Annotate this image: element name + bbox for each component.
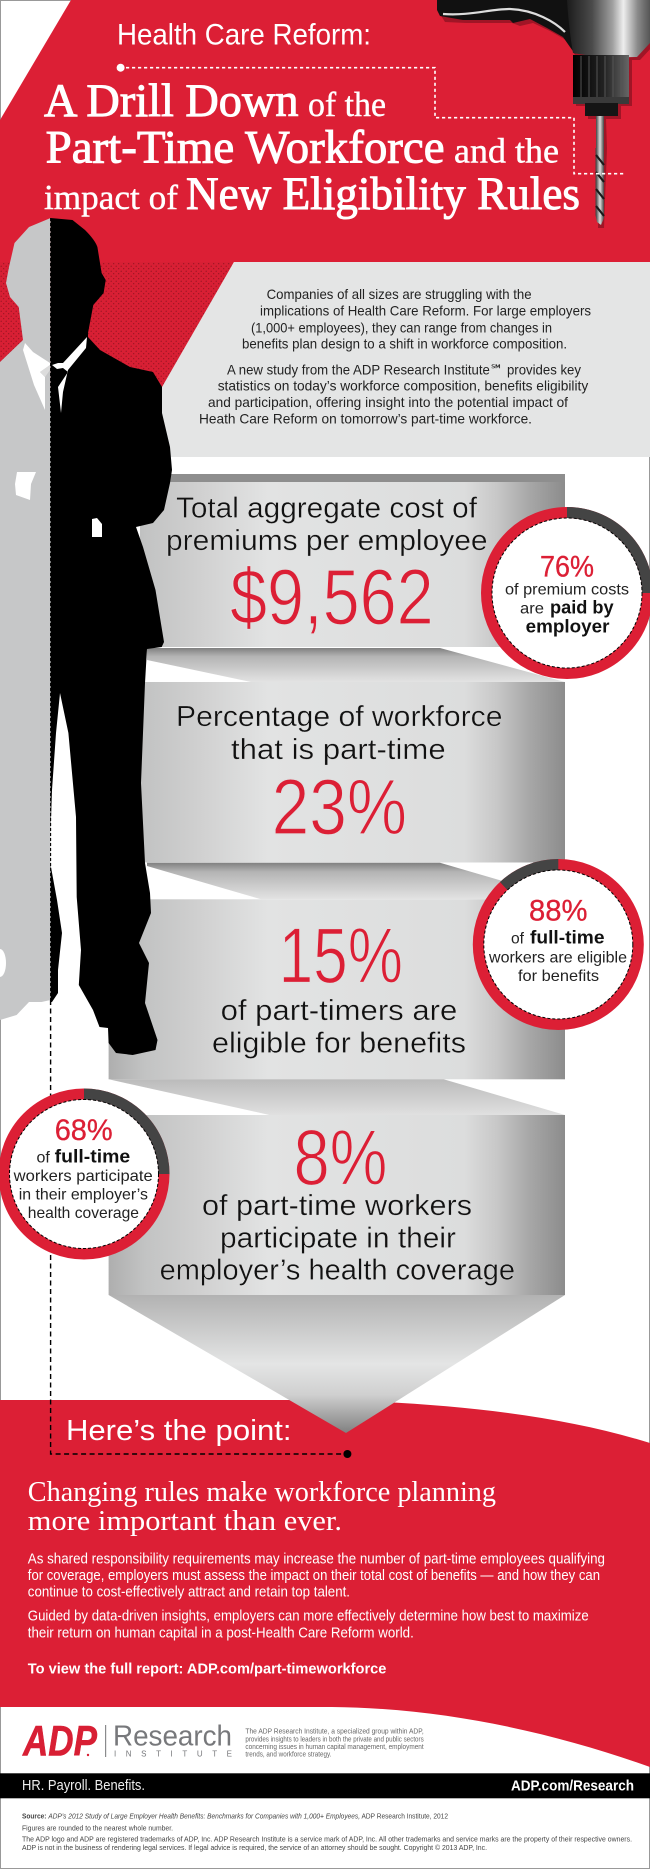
intro text: benefits plan design to a shift in workforce composition. [242,335,567,351]
subheading: changing rules [28,1476,496,1537]
stat label: part-timers eligible [212,995,466,1060]
source and legal footnotes: Source: ADP’s 2012 Study of Large Employer Health Benefits: Benchmarks for Companies with 1,000+ Employees, ADP Research Institute, 2012 [22,1812,448,1821]
logo description text: concerning issues in human capital management, employment [245,1744,424,1751]
title line: impact of: impact of [44,178,178,217]
callout: 68% of full-time participate [4,1094,164,1254]
arrow pointing down [109,1295,565,1433]
callout text: premium costs: employer [526,617,610,637]
title line: Part-Time Workforce: Part-Time Workforce [46,122,445,174]
subheading: changing rules: Changing rules make workforce planning [28,1476,496,1508]
title block [44,18,580,220]
dashed line from silhouette to conclusion [51,218,351,1458]
stat label: part-timers eligible: of part-timers are [221,995,457,1027]
stat label: percentage of workforce: Percentage of workforce [176,701,502,733]
website: ADP.com/Research [511,1778,634,1794]
logo description text: provides insights to leaders in both the private and public sectors [245,1736,424,1743]
white hand gap [0,949,6,977]
stat label: participation: participate in their [220,1222,456,1254]
shirt collar left [23,343,50,410]
intro text: and participation, offering insight into the potential impact of [208,394,568,410]
call to action: full report: To view the full report: ADP.com/part-timeworkforce [28,1661,386,1677]
callout text: full-time eligible: of [511,930,525,947]
callout text: full-time eligible: for benefits [518,968,599,985]
stat label: total aggregate cost: premiums per employee [166,525,488,557]
conclusion body text: Guided by data-driven insights, employers can more effectively determine how best to maximize [28,1609,589,1625]
callout text: full-time participate: full-time [55,1146,130,1166]
shirt collar right [52,337,87,413]
callout text: full-time eligible [488,927,627,985]
panel: total aggregate cost [140,474,565,647]
tie knot grey [40,365,50,377]
logo: ADP Research Institute [22,1718,232,1766]
callout text: premium costs: paid by [550,597,614,617]
panel: header red band [0,0,650,262]
callout text: full-time participate: health coverage [28,1205,139,1222]
callout: 76% of premium costs [486,512,648,674]
logo: ADP Research Institute: Research [113,1721,232,1753]
logo description text [245,1729,424,1759]
conclusion body text: As shared responsibility requirements may increase the number of part-time employees qualifying [28,1552,605,1568]
subheading: changing rules: more important than ever. [28,1505,342,1537]
intro text: implications of Health Care Reform. For large employers [260,303,591,319]
footer black bar [0,1773,650,1798]
logo: ADP Research Institute: INSTITUTE [114,1750,232,1759]
callout text: full-time eligible: workers are eligible [488,950,627,967]
intro text: statistics on today’s workforce composition, benefits eligibility [218,378,588,394]
stat label: total aggregate cost: Total aggregate cost of [176,492,478,524]
callout value: 88%: 88% [529,895,588,928]
panel: part-time participation [109,1112,565,1295]
conclusion body text: their return on human capital in a post-Health Care Reform world. [28,1625,414,1641]
conclusion body text [28,1552,605,1641]
conclusion body text: continue to cost-effectively attract and retain top talent. [28,1584,350,1600]
title line: A Drill Down: A Drill Down [44,75,298,127]
source and legal footnotes: Figures are rounded to the nearest whole number. [22,1823,173,1832]
callout text: full-time participate: workers participate [13,1168,153,1185]
callout value: 76%: 76% [540,551,594,584]
callout text: full-time participate: of [36,1149,50,1166]
stat label: participation: employer’s health coverage [160,1254,515,1286]
panel: red conclusion band [0,1400,650,1767]
intro text: Companies of all sizes are struggling with the [267,286,532,302]
callout text: full-time participate [13,1146,153,1222]
panel: percentage part-time [140,682,565,862]
title line: New Eligibility Rules: New Eligibility Rules [186,168,580,220]
stat label: part-timers eligible: eligible for benefits [212,1028,466,1060]
intro text [199,286,591,426]
fold between panels 1 and 2 [147,648,565,682]
source and legal footnotes: ADP is not in the business of rendering legal services. If legal advice is required, the service of an attorney should be sought. Copyright © 2013 ADP, Inc. [22,1843,487,1852]
stat label: percentage of workforce: that is part-time [231,734,446,766]
intro text: (1,000+ employees), they can range from changes in [251,319,552,335]
icon: power drill [437,0,650,228]
callout text: premium costs: of premium costs [505,581,629,598]
fold between panels 3 and 4 [109,1079,565,1115]
callout text: premium costs: are [520,600,544,617]
tagline: HR. Payroll. Benefits. [22,1778,145,1794]
heading: Here's the point: Here’s the point: [66,1415,292,1447]
title: Health Care Reform: Health Care Reform: [117,18,371,52]
pocket square right [92,518,102,537]
title line: and the: and the [454,132,559,171]
stat value: 8%: 8% [294,1112,388,1201]
intro text: Heath Care Reform on tomorrow’s part-time workforce. [199,410,532,426]
stat value: 23%: 23% [272,762,407,851]
stat label: participation: of part-time workers [202,1190,472,1222]
logo: ADP Research Institute: ADP [22,1718,97,1766]
panel: part-timers eligible [109,899,565,1079]
title line: of the: of the [308,85,386,124]
logo description text: trends, and workforce strategy. [245,1752,331,1759]
dotted connector from title to drill [117,64,625,174]
panel: intro grey background [150,262,650,457]
stat value: 15%: 15% [279,911,403,1000]
callout: 88% of full-time eligible [478,864,638,1024]
source and legal footnotes [22,1812,632,1852]
stat label: percentage of workforce [176,701,502,766]
conclusion body text: for coverage, employers must assess the impact on their total cost of benefits — and how they can [28,1568,600,1584]
pocket square left [15,472,36,500]
logo description text: The ADP Research Institute, a specialized group within ADP, [245,1729,424,1736]
stat label: participation [160,1190,515,1286]
silhouette: businessman [0,218,172,1055]
panel: dotted red backdrop [0,262,234,390]
stat value: $9,562: $9,562 [230,552,434,641]
intro text: A new study from the ADP Research Institute℠ provides key [227,361,581,377]
callout text: premium costs [505,581,629,637]
stat label: total aggregate cost [166,492,488,557]
fold between panels 2 and 3 [147,863,565,899]
callout value: 68%: 68% [55,1114,113,1147]
callout text: full-time eligible: full-time [530,927,604,947]
callout text: full-time participate: in their employer’s [19,1186,148,1203]
